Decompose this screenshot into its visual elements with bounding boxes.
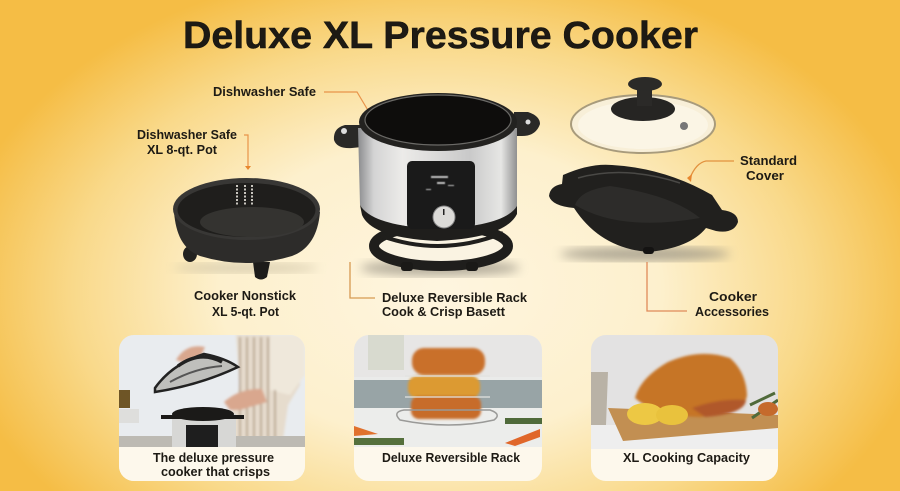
label: dishwasher safe	[213, 85, 369, 112]
label: reversible rack: Deluxe Reversible Rack	[382, 291, 527, 305]
label: cooker nonstick: XL 5-qt. Pot	[212, 305, 280, 319]
label: cooker accessories: Cooker	[709, 290, 757, 304]
roast turkey	[635, 354, 747, 417]
icon: main pressure cooker	[334, 93, 540, 276]
caption box	[354, 447, 542, 481]
stacked food on racks	[408, 348, 485, 419]
panel: cooker that crisps	[119, 335, 305, 481]
label: reversible rack: Cook & Crisp Basett	[382, 305, 506, 319]
label: cooker nonstick	[194, 289, 296, 319]
label: standard cover: Cover	[746, 169, 784, 183]
cutting board	[608, 408, 778, 441]
cloth	[591, 372, 608, 425]
dial	[433, 206, 455, 228]
control panel	[407, 161, 475, 229]
label: standard cover	[687, 154, 797, 183]
label: dishwasher safe: Dishwasher Safe	[213, 85, 316, 99]
worktop and cooker	[119, 436, 305, 447]
panel: cooker that crisps: The deluxe pressure	[153, 451, 274, 465]
lemon slices	[627, 403, 663, 425]
label: cooker accessories: Accessories	[695, 305, 769, 319]
panel: reversible rack: Deluxe Reversible Rack	[382, 451, 520, 465]
cooker handles	[334, 112, 540, 148]
garnish	[750, 393, 778, 418]
label: cooker accessories	[647, 262, 769, 319]
label: reversible rack	[350, 262, 527, 319]
label: cooker nonstick: Cooker Nonstick	[194, 289, 296, 303]
reversible rack	[374, 226, 508, 271]
panel: cooker that crisps: cooker that crisps	[161, 465, 270, 479]
icon: glass lid	[571, 77, 715, 153]
panel: XL cooking capacity	[591, 335, 778, 481]
panel: reversible rack	[354, 335, 542, 481]
held lid	[155, 354, 238, 392]
label: dishwasher safe pot with arrow	[137, 128, 251, 170]
caption box	[591, 449, 778, 481]
vegetables	[354, 426, 378, 436]
rim	[359, 93, 517, 151]
caption box	[119, 447, 305, 481]
person with apron	[176, 335, 305, 447]
label: dishwasher safe pot with arrow: Dishwasher Safe	[137, 128, 237, 142]
label: dishwasher safe pot with arrow: XL 8-qt. Pot	[147, 143, 218, 157]
cooker body	[358, 128, 517, 229]
icon: nonstick pot	[173, 178, 320, 280]
title: Deluxe XL Pressure Cooker	[183, 15, 698, 57]
label: standard cover: Standard	[740, 154, 797, 168]
icon: standard cover	[549, 165, 738, 261]
panel: XL cooking capacity: XL Cooking Capacity	[623, 451, 750, 465]
